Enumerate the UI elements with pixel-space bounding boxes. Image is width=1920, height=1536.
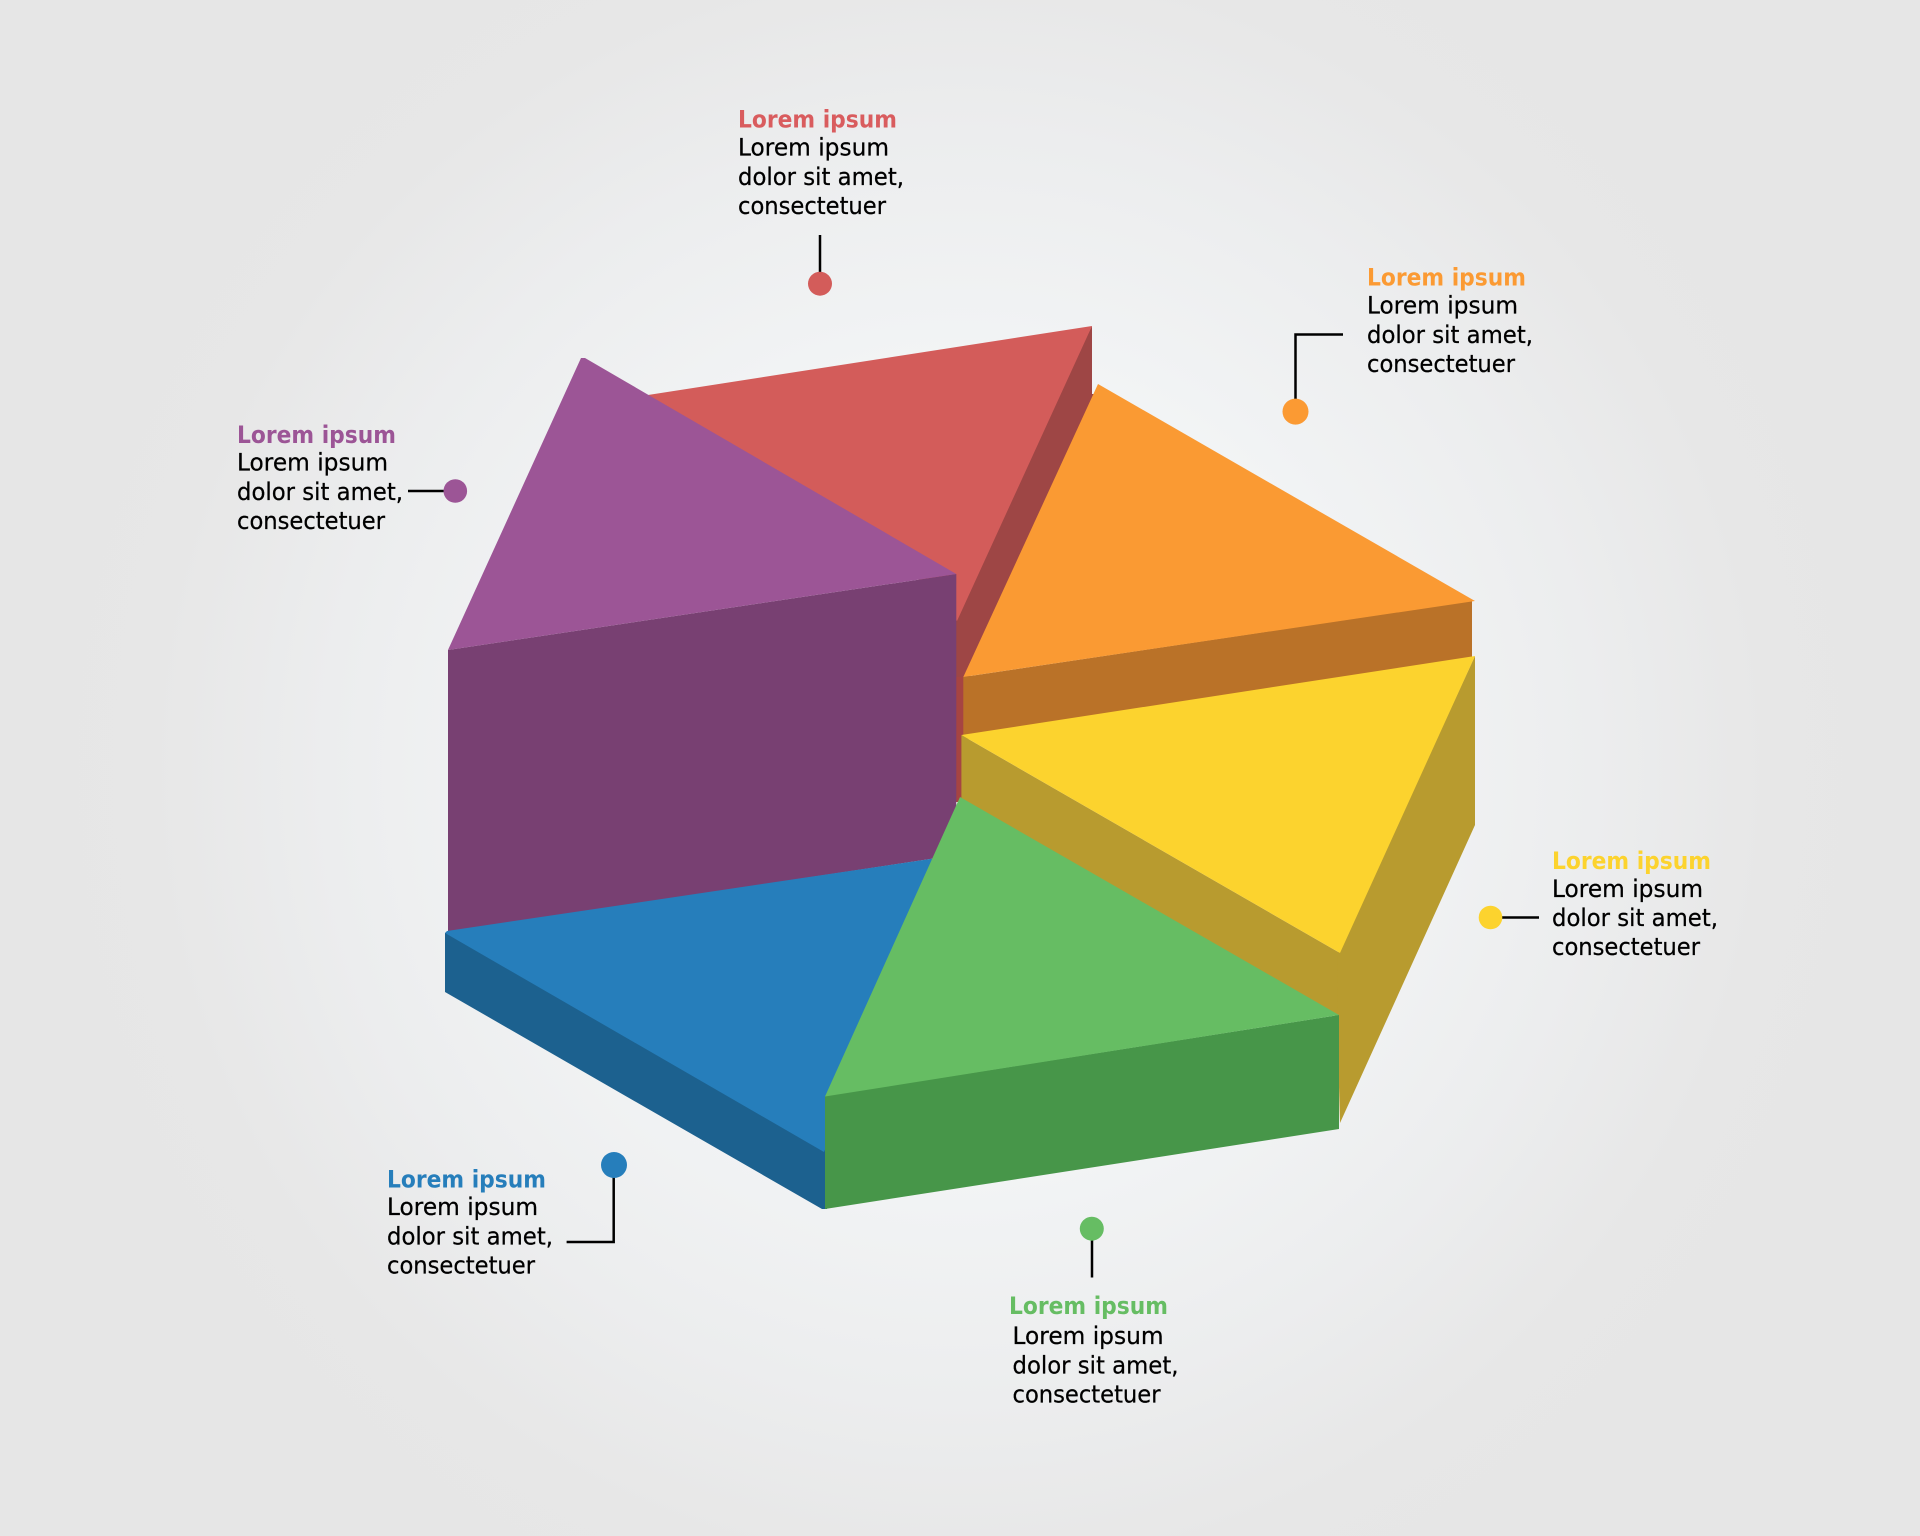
body: yellow: Lorem ipsum (1552, 875, 1703, 903)
body: green (1012, 1322, 1178, 1408)
segment: orange (963, 384, 1475, 740)
body: green: consectetuer (1012, 1380, 1161, 1408)
heading: yellow: Lorem ipsum (1552, 847, 1711, 875)
body: yellow (1552, 875, 1718, 961)
body: blue: Lorem ipsum (387, 1193, 538, 1221)
segment: green (825, 797, 1339, 1209)
body: blue: dolor sit amet, (387, 1222, 553, 1250)
segment: red (648, 326, 1096, 802)
body: green: dolor sit amet, (1012, 1351, 1178, 1379)
connector: red (808, 235, 832, 296)
body: orange (1367, 292, 1533, 378)
body: purple: consectetuer (237, 507, 385, 535)
connector: blue (567, 1152, 627, 1242)
body: blue (387, 1193, 553, 1279)
body: purple: dolor sit amet, (237, 478, 403, 506)
callout: yellow (1479, 847, 1718, 961)
heading: green: Lorem ipsum (1009, 1292, 1168, 1320)
body: red (738, 134, 904, 220)
body: orange: consectetuer (1367, 350, 1515, 378)
body: purple: Lorem ipsum (237, 448, 388, 476)
body: orange: dolor sit amet, (1367, 321, 1533, 349)
body: purple (237, 448, 403, 535)
callout: red (738, 106, 904, 296)
segment: blue (445, 856, 950, 1209)
heading: red: Lorem ipsum (738, 106, 897, 134)
heading: blue: Lorem ipsum (387, 1166, 546, 1194)
body: red: dolor sit amet, (738, 163, 904, 191)
body: yellow: consectetuer (1552, 933, 1700, 961)
callout: blue (387, 1152, 627, 1279)
body: green: Lorem ipsum (1012, 1322, 1164, 1350)
connector: orange (1282, 334, 1343, 425)
body: red: consectetuer (738, 192, 886, 220)
callout: purple (237, 421, 467, 535)
connector: purple (408, 479, 467, 503)
connector: yellow (1479, 906, 1539, 929)
body: blue: consectetuer (387, 1251, 535, 1279)
body: orange: Lorem ipsum (1367, 292, 1518, 320)
body: yellow: dolor sit amet, (1552, 904, 1718, 932)
segment: purple (448, 358, 956, 932)
callout: orange (1282, 264, 1533, 425)
connector: green (1080, 1217, 1104, 1278)
hexagon chart (445, 326, 1475, 1209)
heading: purple: Lorem ipsum (237, 421, 396, 449)
segment: yellow (961, 656, 1475, 1123)
callout: green (1009, 1217, 1178, 1408)
body: red: Lorem ipsum (738, 134, 889, 162)
heading: orange: Lorem ipsum (1367, 264, 1526, 292)
